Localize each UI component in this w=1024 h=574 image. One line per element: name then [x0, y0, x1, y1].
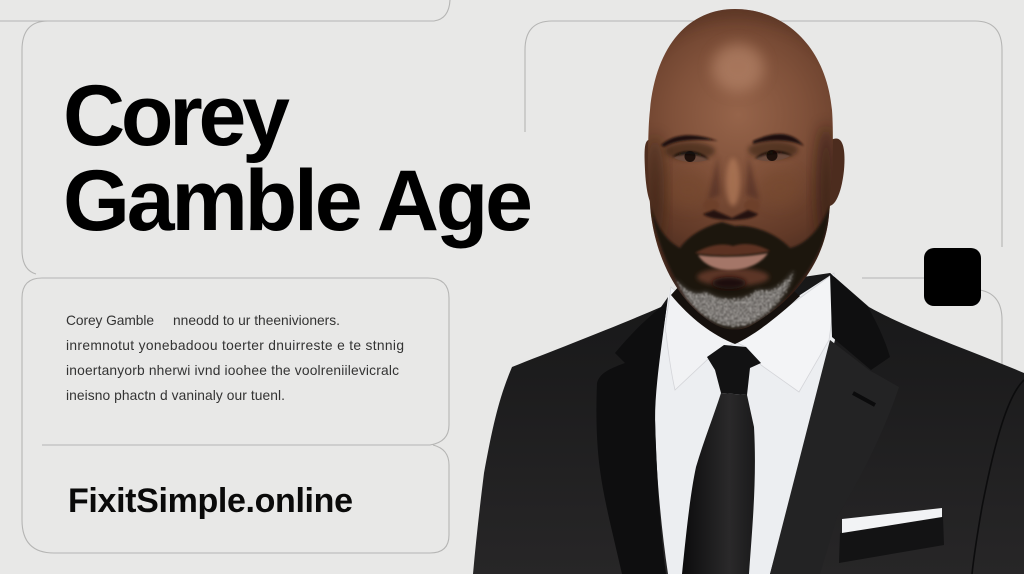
upper lip [695, 244, 770, 255]
cheek tone [668, 170, 800, 208]
pocket square [842, 508, 942, 533]
cheek shade right [816, 125, 836, 245]
nose sides [708, 160, 759, 199]
description panel outline [22, 278, 449, 553]
right ear [828, 138, 844, 206]
suit jacket [473, 273, 1024, 574]
description text block: Corey Gamble [66, 313, 154, 328]
description text block: nneodd to ur theenivioners. [173, 313, 340, 328]
nostril wings [716, 201, 758, 206]
title [63, 68, 533, 249]
lower right curve [980, 290, 1002, 368]
skin below lip [697, 268, 769, 286]
necktie [682, 393, 755, 574]
description text block [66, 313, 404, 403]
right upper lapel [830, 273, 890, 370]
right eyebrow [753, 134, 804, 146]
title: Gamble Age [63, 153, 533, 249]
beard base [650, 205, 830, 330]
nose highlight [726, 158, 740, 206]
lapel buttonhole [853, 393, 875, 405]
right panel outline [525, 21, 1002, 247]
pocket [839, 517, 944, 563]
grey beard base [675, 270, 794, 326]
nose underside shade [703, 210, 758, 220]
description text block: inremnotut yonebadoou toerter dnuirreste e te stnnig [66, 338, 404, 353]
portrait of man in black suit [473, 0, 1024, 574]
left eyebrow [661, 135, 718, 147]
suit seam [972, 380, 1024, 574]
left ear [645, 140, 654, 206]
soul patch [712, 277, 746, 289]
tie knot [707, 345, 761, 395]
head [648, 9, 833, 330]
title: Corey [63, 68, 290, 164]
description text block: ineisno phactn d vaninaly our tuenl. [66, 388, 285, 403]
face details clipped to head [646, 0, 836, 330]
top strip panel edge [0, 0, 450, 21]
black rounded square [924, 248, 981, 306]
left collar [665, 287, 735, 390]
forehead highlight [712, 44, 764, 92]
left eye [672, 151, 710, 162]
left lapel [596, 303, 667, 574]
website name: FixitSimple.online [68, 482, 353, 520]
description text block: inoertanyorb nherwi ivnd ioohee the voolreniilevicralc [66, 363, 399, 378]
right eye [754, 150, 793, 161]
cheek shade left [646, 135, 664, 245]
right collar [735, 273, 834, 392]
white shirt [655, 273, 835, 574]
crown shade [676, 9, 805, 42]
grey beard texture [675, 270, 794, 326]
lower lip [698, 253, 768, 270]
right lapel face [770, 340, 899, 574]
title panel outline [22, 21, 434, 274]
jaw shadow line [671, 285, 800, 344]
connector line to black square [862, 277, 924, 279]
eye socket shade [665, 141, 798, 160]
